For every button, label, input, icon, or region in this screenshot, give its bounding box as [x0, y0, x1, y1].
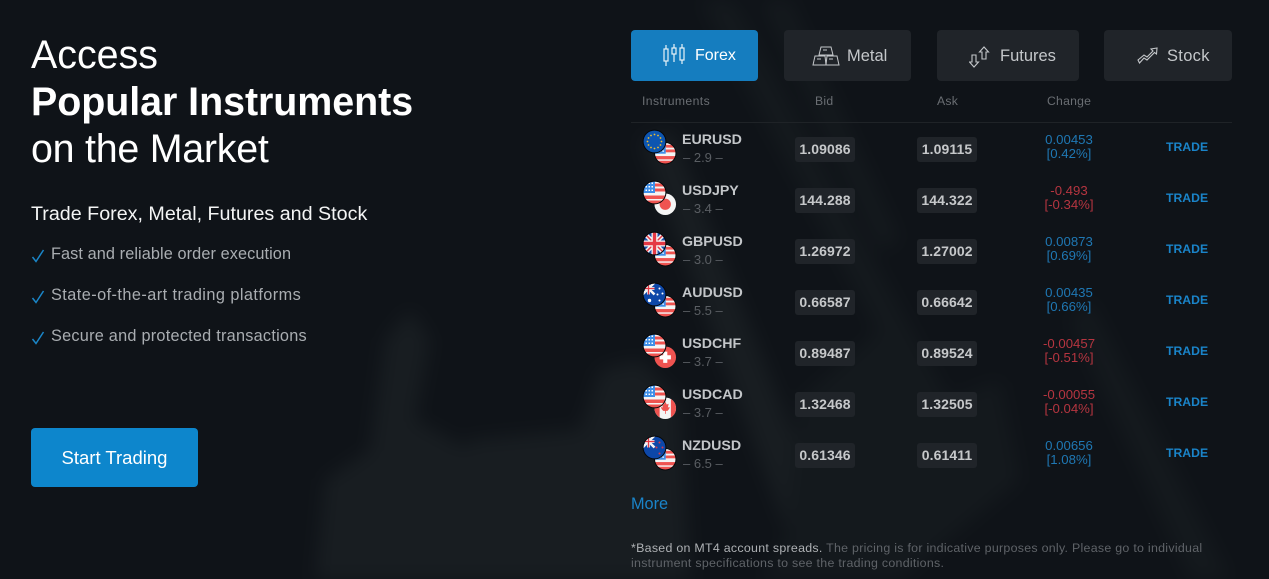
bid price: 0.89487: [799, 345, 851, 361]
spread: – 3.7 –: [683, 354, 723, 369]
ask price: [917, 137, 977, 162]
ask price: 144.322: [921, 192, 973, 208]
spread: – 6.5 –: [683, 456, 723, 471]
trade link: TRADE: [1166, 293, 1208, 307]
tab: futures: [937, 30, 1079, 81]
ask price: [917, 188, 977, 213]
tab: forex: [631, 30, 758, 81]
subtitle: Trade Forex, Metal, Futures and Stock: [31, 203, 367, 225]
symbol: NZDUSD: [682, 438, 741, 454]
bid price: 144.288: [799, 192, 851, 208]
disclaimer: [631, 541, 1202, 570]
bid price: [795, 188, 855, 213]
icon: rising arrow: [1137, 47, 1158, 64]
trade link: TRADE: [1166, 242, 1208, 256]
change: 0.00656: [1045, 438, 1093, 453]
ask price: 1.27002: [921, 243, 973, 259]
change: 0.00435: [1045, 285, 1093, 300]
flags: USD JPY: [642, 180, 676, 215]
flags: GBP USD: [642, 232, 676, 266]
trade link: TRADE: [1166, 446, 1208, 460]
symbol: USDCAD: [682, 387, 743, 403]
ask price: 0.89524: [921, 345, 973, 361]
change: [1045, 438, 1093, 467]
symbol: AUDUSD: [682, 285, 743, 301]
disclaimer: instrument specifications to see the trading conditions.: [631, 556, 944, 570]
flags: USD CHF: [642, 334, 676, 368]
tab: metal: [784, 30, 911, 81]
benefit text: Secure and protected transactions: [51, 327, 307, 345]
column: bid: Bid: [815, 94, 833, 108]
icon: gold bars: [812, 46, 840, 66]
bid price: 1.32468: [799, 396, 851, 412]
trade link: TRADE: [1166, 395, 1208, 409]
symbol: GBPUSD: [682, 234, 743, 250]
button: start trading: [31, 428, 198, 487]
change: [-0.04%]: [1044, 401, 1094, 416]
title: on the Market: [31, 127, 269, 171]
flags: EUR USD: [642, 130, 676, 164]
change: 0.00873: [1045, 234, 1093, 249]
bid price: [795, 392, 855, 417]
title: Popular Instruments: [31, 80, 413, 124]
column: ask: Ask: [937, 94, 958, 108]
change: [0.69%]: [1047, 248, 1091, 263]
button: start trading: Start Trading: [62, 447, 167, 468]
change: [1045, 234, 1093, 263]
trade link: TRADE: [1166, 191, 1208, 205]
icon: up and down arrows: [969, 46, 990, 68]
symbol: EURUSD: [682, 132, 742, 148]
change: -0.00055: [1043, 387, 1095, 402]
benefit text: State-of-the-art trading platforms: [51, 286, 301, 304]
label: Forex: [695, 47, 736, 64]
trade link: TRADE: [1166, 344, 1208, 358]
bid price: [795, 137, 855, 162]
spread: – 3.4 –: [683, 201, 723, 216]
symbol: USDCHF: [682, 336, 741, 352]
change: -0.00457: [1043, 336, 1095, 351]
ask price: [917, 443, 977, 468]
flags: USD CAD: [642, 384, 676, 419]
flags: AUD USD: [642, 282, 676, 318]
spread: – 3.7 –: [683, 405, 723, 420]
tab: stock: [1104, 30, 1232, 81]
column: change: Change: [1047, 94, 1091, 108]
spread: – 5.5 –: [683, 303, 723, 318]
change: [0.66%]: [1047, 299, 1091, 314]
title: Access: [31, 33, 158, 77]
change: [1043, 387, 1095, 416]
bid price: [795, 290, 855, 315]
spread: – 2.9 –: [683, 150, 723, 165]
ask price: 1.32505: [921, 396, 973, 412]
table header: [631, 94, 1232, 123]
bid price: 1.26972: [799, 243, 851, 259]
more link: More: [631, 495, 668, 513]
ask price: 0.61411: [922, 447, 972, 463]
ask price: [917, 341, 977, 366]
column: instruments: Instruments: [642, 94, 710, 108]
trade link: TRADE: [1166, 140, 1208, 154]
label: Metal: [847, 47, 887, 65]
change: -0.493: [1050, 183, 1088, 198]
change: [1044, 183, 1094, 212]
title: [31, 33, 413, 171]
label: Stock: [1167, 47, 1210, 65]
symbol: USDJPY: [682, 183, 739, 199]
label: Futures: [1000, 47, 1056, 65]
icon: candlesticks: [663, 44, 685, 66]
change: [1045, 132, 1093, 161]
change: [0.42%]: [1047, 146, 1091, 161]
bid price: [795, 443, 855, 468]
bid price: [795, 341, 855, 366]
change: [-0.51%]: [1044, 350, 1094, 365]
icon: check: [32, 250, 44, 263]
bid price: 0.66587: [799, 294, 851, 310]
change: [1.08%]: [1047, 452, 1091, 467]
benefit text: Fast and reliable order execution: [51, 245, 291, 263]
disclaimer: *Based on MT4 account spreads. The pricing is for indicative purposes only. Please go to individual: [631, 541, 1202, 555]
icon: check: [32, 290, 44, 304]
ask price: [917, 392, 977, 417]
change: 0.00453: [1045, 132, 1093, 147]
spread: – 3.0 –: [683, 252, 723, 267]
change: [1045, 285, 1093, 314]
ask price: [917, 290, 977, 315]
flags: NZD USD: [642, 436, 676, 470]
bid price: [795, 239, 855, 264]
bid price: 1.09086: [799, 141, 851, 157]
change: [1043, 336, 1095, 365]
change: [-0.34%]: [1044, 197, 1094, 212]
ask price: 1.09115: [922, 141, 972, 157]
bid price: 0.61346: [799, 447, 851, 463]
ask price: [917, 239, 977, 264]
benefits list: [32, 245, 307, 345]
ask price: 0.66642: [921, 294, 973, 310]
icon: check: [32, 332, 44, 345]
